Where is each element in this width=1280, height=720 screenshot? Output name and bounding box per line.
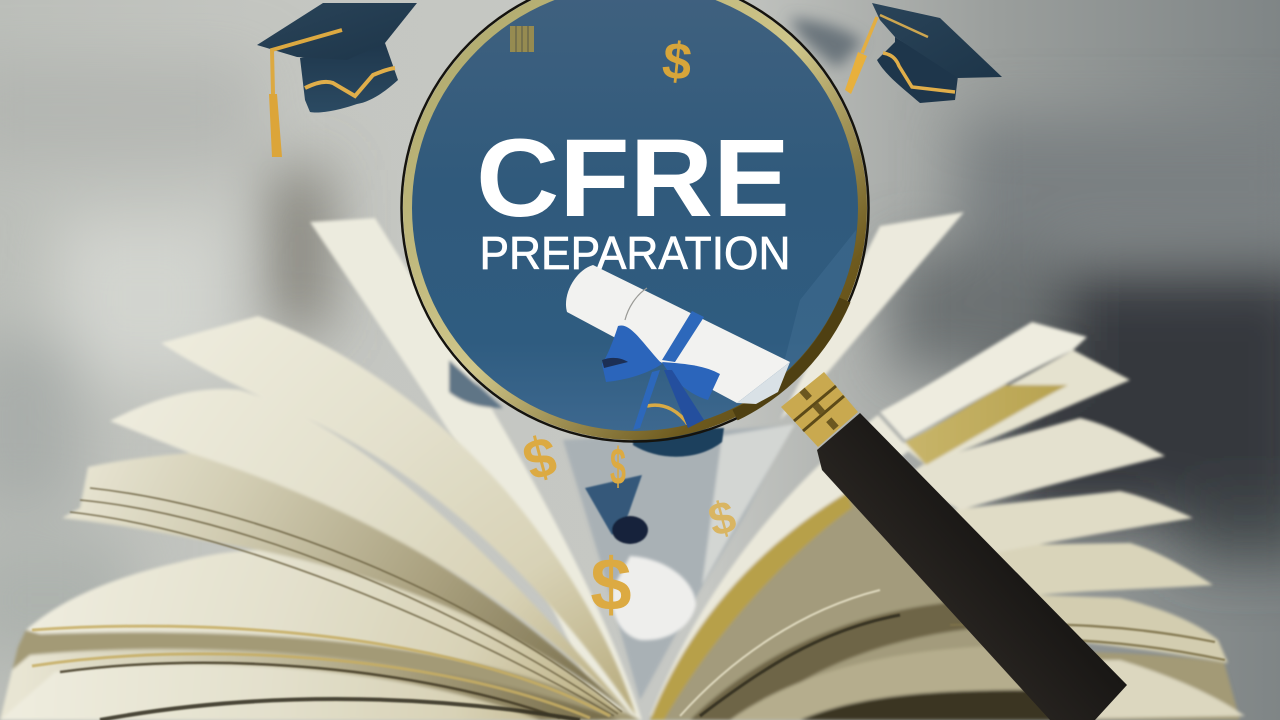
book: right page stack xyxy=(650,322,1245,720)
icon: dollar large: $ xyxy=(590,543,632,626)
handle: magnifier grip xyxy=(817,413,1127,720)
book: left page stack xyxy=(0,316,640,720)
lens reflection xyxy=(785,232,856,372)
book: page edge lines xyxy=(32,488,1225,720)
icon: tassel top xyxy=(510,26,534,52)
open book xyxy=(0,212,1245,720)
lens rim xyxy=(402,0,868,442)
lens contents xyxy=(476,26,856,426)
subtitle: PREPARATION: PREPARATION xyxy=(480,227,790,279)
icon: graduation cap left xyxy=(257,3,417,157)
icon: dollar top: $ xyxy=(660,32,694,92)
icon: dollar small centre: $ xyxy=(610,437,626,495)
icon: small graduation cap xyxy=(585,475,648,544)
icon: gold arc in lens xyxy=(647,405,689,426)
diploma scroll xyxy=(566,265,790,430)
shadow blob: behind lens, top right xyxy=(790,18,862,68)
icon: graduation cap right xyxy=(845,3,1002,103)
handle: brass collar xyxy=(781,372,858,447)
icon: dollar right: $ xyxy=(703,490,741,546)
lens xyxy=(412,0,858,431)
falling items below lens xyxy=(517,424,741,640)
icon: diploma ball xyxy=(612,556,696,640)
magnifying glass xyxy=(402,0,1127,720)
icon: blue cap shadow under lens xyxy=(633,428,724,457)
icon: blue ribbon bow xyxy=(602,311,720,430)
book: raised centre pages xyxy=(310,212,964,720)
title: CFRE: CFRE xyxy=(476,117,790,240)
icon: dollar left: $ xyxy=(517,424,564,493)
lens rim: thick lower-right section xyxy=(735,300,845,415)
